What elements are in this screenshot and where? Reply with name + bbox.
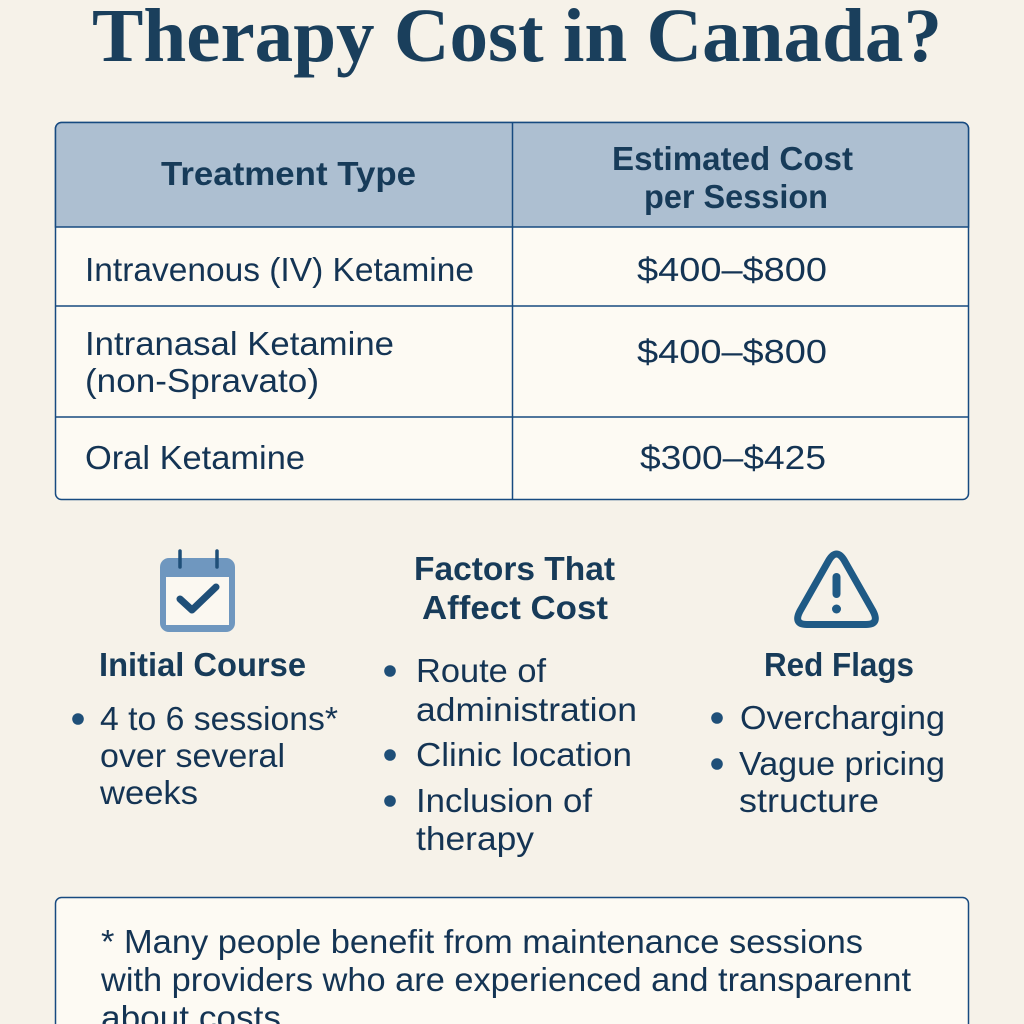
row: oral ketamine: Oral Ketamine xyxy=(85,439,305,476)
table body background xyxy=(56,122,968,500)
row: oral ketamine: $300–$425 xyxy=(640,439,826,476)
header: estimated cost per session xyxy=(612,140,853,215)
header: treatment type: Treatment Type xyxy=(161,155,416,192)
bullet list: factors xyxy=(384,652,637,857)
header: estimated cost per session: Estimated Cost xyxy=(612,140,853,177)
icon: warning triangle xyxy=(798,554,875,624)
panel: red flags xyxy=(711,554,945,819)
row: intravenous ketamine xyxy=(85,251,827,288)
row: intravenous ketamine: Intravenous (IV) Ketamine xyxy=(85,251,474,288)
table header row xyxy=(56,122,968,227)
heading: initial course: Initial Course xyxy=(99,646,306,683)
icon: calendar with check xyxy=(160,551,235,632)
row: intranasal ketamine: Intranasal Ketamine xyxy=(85,325,394,362)
bullet list: factors: Clinic location xyxy=(416,736,632,773)
row: intranasal ketamine: $400–$800 xyxy=(637,333,827,370)
panel: initial course xyxy=(72,551,338,811)
bullet list: initial course: over several xyxy=(100,737,285,774)
heading: factors that affect cost xyxy=(414,550,615,626)
footnote text xyxy=(100,923,911,1024)
footnote text: * Many people benefit from maintenance sessions xyxy=(101,923,863,960)
bullet list: factors: administration xyxy=(416,691,637,728)
bullet list: red flags xyxy=(711,699,945,819)
cost table xyxy=(55,122,969,500)
bullet list: red flags: structure xyxy=(739,782,879,819)
row: intravenous ketamine: $400–$800 xyxy=(637,251,827,288)
footnote text: with providers who are experienced and transparennt xyxy=(100,961,911,998)
bullet list: initial course: weeks xyxy=(99,774,198,811)
bullet list: red flags: Vague pricing xyxy=(739,745,945,782)
bullet list: red flags: Overcharging xyxy=(740,699,945,736)
panel: factors that affect cost xyxy=(384,550,637,857)
row: intranasal ketamine: (non-Spravato) xyxy=(85,362,319,399)
bullet list: initial course: 4 to 6 sessions* xyxy=(100,700,338,737)
heading: factors that affect cost: Affect Cost xyxy=(422,589,608,626)
bullet list: factors: Inclusion of xyxy=(416,782,593,819)
row: oral ketamine xyxy=(85,439,826,476)
heading: red flags: Red Flags xyxy=(764,646,914,683)
bullet list: initial course xyxy=(72,700,338,811)
bullet list: factors: therapy xyxy=(416,820,535,857)
row: intranasal ketamine xyxy=(85,325,827,399)
footnote panel xyxy=(56,898,968,1024)
bullet list: factors: Route of xyxy=(416,652,547,689)
heading: factors that affect cost: Factors That xyxy=(414,550,615,587)
header: estimated cost per session: per Session xyxy=(644,178,828,215)
